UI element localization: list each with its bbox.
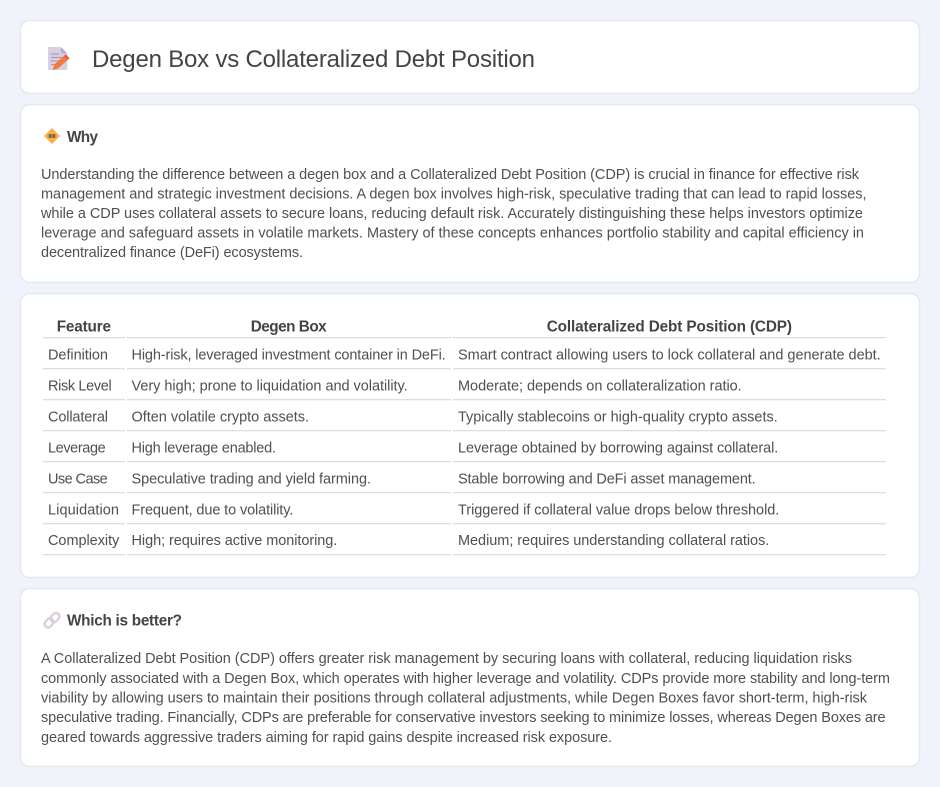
table header: Feature [57, 319, 111, 336]
icon: document with pencil [48, 47, 70, 70]
row: leverage: Leverage obtained by borrowing against collateral. [458, 441, 778, 457]
panel: title header [20, 20, 920, 94]
row: leverage [43, 441, 886, 462]
row: collateral [43, 410, 886, 431]
row: liquidation [43, 502, 886, 524]
text block: why: leverage and safeguard assets in volatile markets. Mastery of these concepts enhances portfolio stability and capital efficiency in [41, 226, 864, 242]
panel: which is better [20, 588, 920, 766]
row: risk level: Very high; prone to liquidation and volatility. [132, 379, 408, 395]
row: liquidation: Liquidation [48, 502, 119, 518]
row: leverage: High leverage enabled. [132, 441, 276, 457]
row: leverage: Leverage [48, 441, 106, 457]
text block: why [40, 167, 866, 261]
row: risk level: Risk Level [48, 379, 112, 395]
row: use case: Stable borrowing and DeFi asset management. [458, 471, 756, 487]
row: complexity: Medium; requires understanding collateral ratios. [458, 533, 769, 549]
row: complexity [43, 533, 886, 555]
row: liquidation: Triggered if collateral value drops below threshold. [458, 502, 779, 518]
row: definition: High-risk, leveraged investment container in DeFi. [132, 347, 446, 363]
row: liquidation: Frequent, due to volatility. [132, 502, 293, 518]
row: risk level: Moderate; depends on collateralization ratio. [458, 379, 742, 395]
icon: chain link [43, 611, 61, 629]
text block: why: while a CDP uses collateral assets to secure loans, reducing default risk. Accurately distinguishing these helps investors optimize [40, 206, 863, 222]
title: Degen Box vs Collateralized Debt Position [92, 46, 535, 73]
text block: which is better: speculative trading. Financially, CDPs are preferable for conservative investors seeking to minimize losses, whereas Degen Boxes are [41, 710, 886, 726]
row: complexity: Complexity [48, 533, 120, 549]
row: definition: Smart contract allowing users to lock collateral and generate debt. [458, 347, 881, 363]
table header [43, 319, 886, 338]
text block: which is better: A Collateralized Debt Position (CDP) offers greater risk management by securing loans with collateral, reducing liquidation risks [41, 651, 852, 667]
text block: which is better [41, 651, 890, 746]
heading: which is better: Which is better? [67, 613, 182, 630]
icon: warning diamond [44, 128, 60, 144]
row: risk level [43, 379, 886, 400]
row: collateral: Often volatile crypto assets. [132, 410, 309, 426]
panel: why [20, 104, 920, 282]
row: complexity: High; requires active monitoring. [132, 533, 337, 549]
row: definition [43, 347, 886, 369]
panel: comparison table [20, 294, 920, 578]
row: definition: Definition [48, 347, 108, 363]
row: use case: Speculative trading and yield farming. [132, 471, 371, 487]
text block: which is better: commonly associated with a Degen Box, which operates with higher leverage and volatility. CDPs provide more stability and long-term [41, 671, 890, 687]
text block: which is better: geared towards aggressive traders aiming for rapid gains despite increased risk exposure. [41, 730, 612, 746]
row: collateral: Collateral [48, 410, 108, 426]
heading: why: Why [67, 129, 98, 146]
row: use case: Use Case [48, 471, 108, 487]
text block: why: Understanding the difference between a degen box and a Collateralized Debt Position (CDP) is crucial in finance for effective risk [41, 167, 860, 183]
text block: why: decentralized finance (DeFi) ecosystems. [41, 245, 303, 261]
table header: Degen Box [251, 319, 327, 336]
text block: why: management and strategic investment decisions. A degen box involves high-risk, speculative trading that can lead to rapid losses, [41, 186, 866, 202]
text block: which is better: viability by allowing users to maintain their positions through collateral adjustments, while Degen Boxes favor short-term, high-risk [41, 691, 868, 707]
table header: Collateralized Debt Position (CDP) [547, 319, 792, 336]
row: use case [43, 471, 886, 493]
row: collateral: Typically stablecoins or high-quality crypto assets. [458, 410, 778, 426]
